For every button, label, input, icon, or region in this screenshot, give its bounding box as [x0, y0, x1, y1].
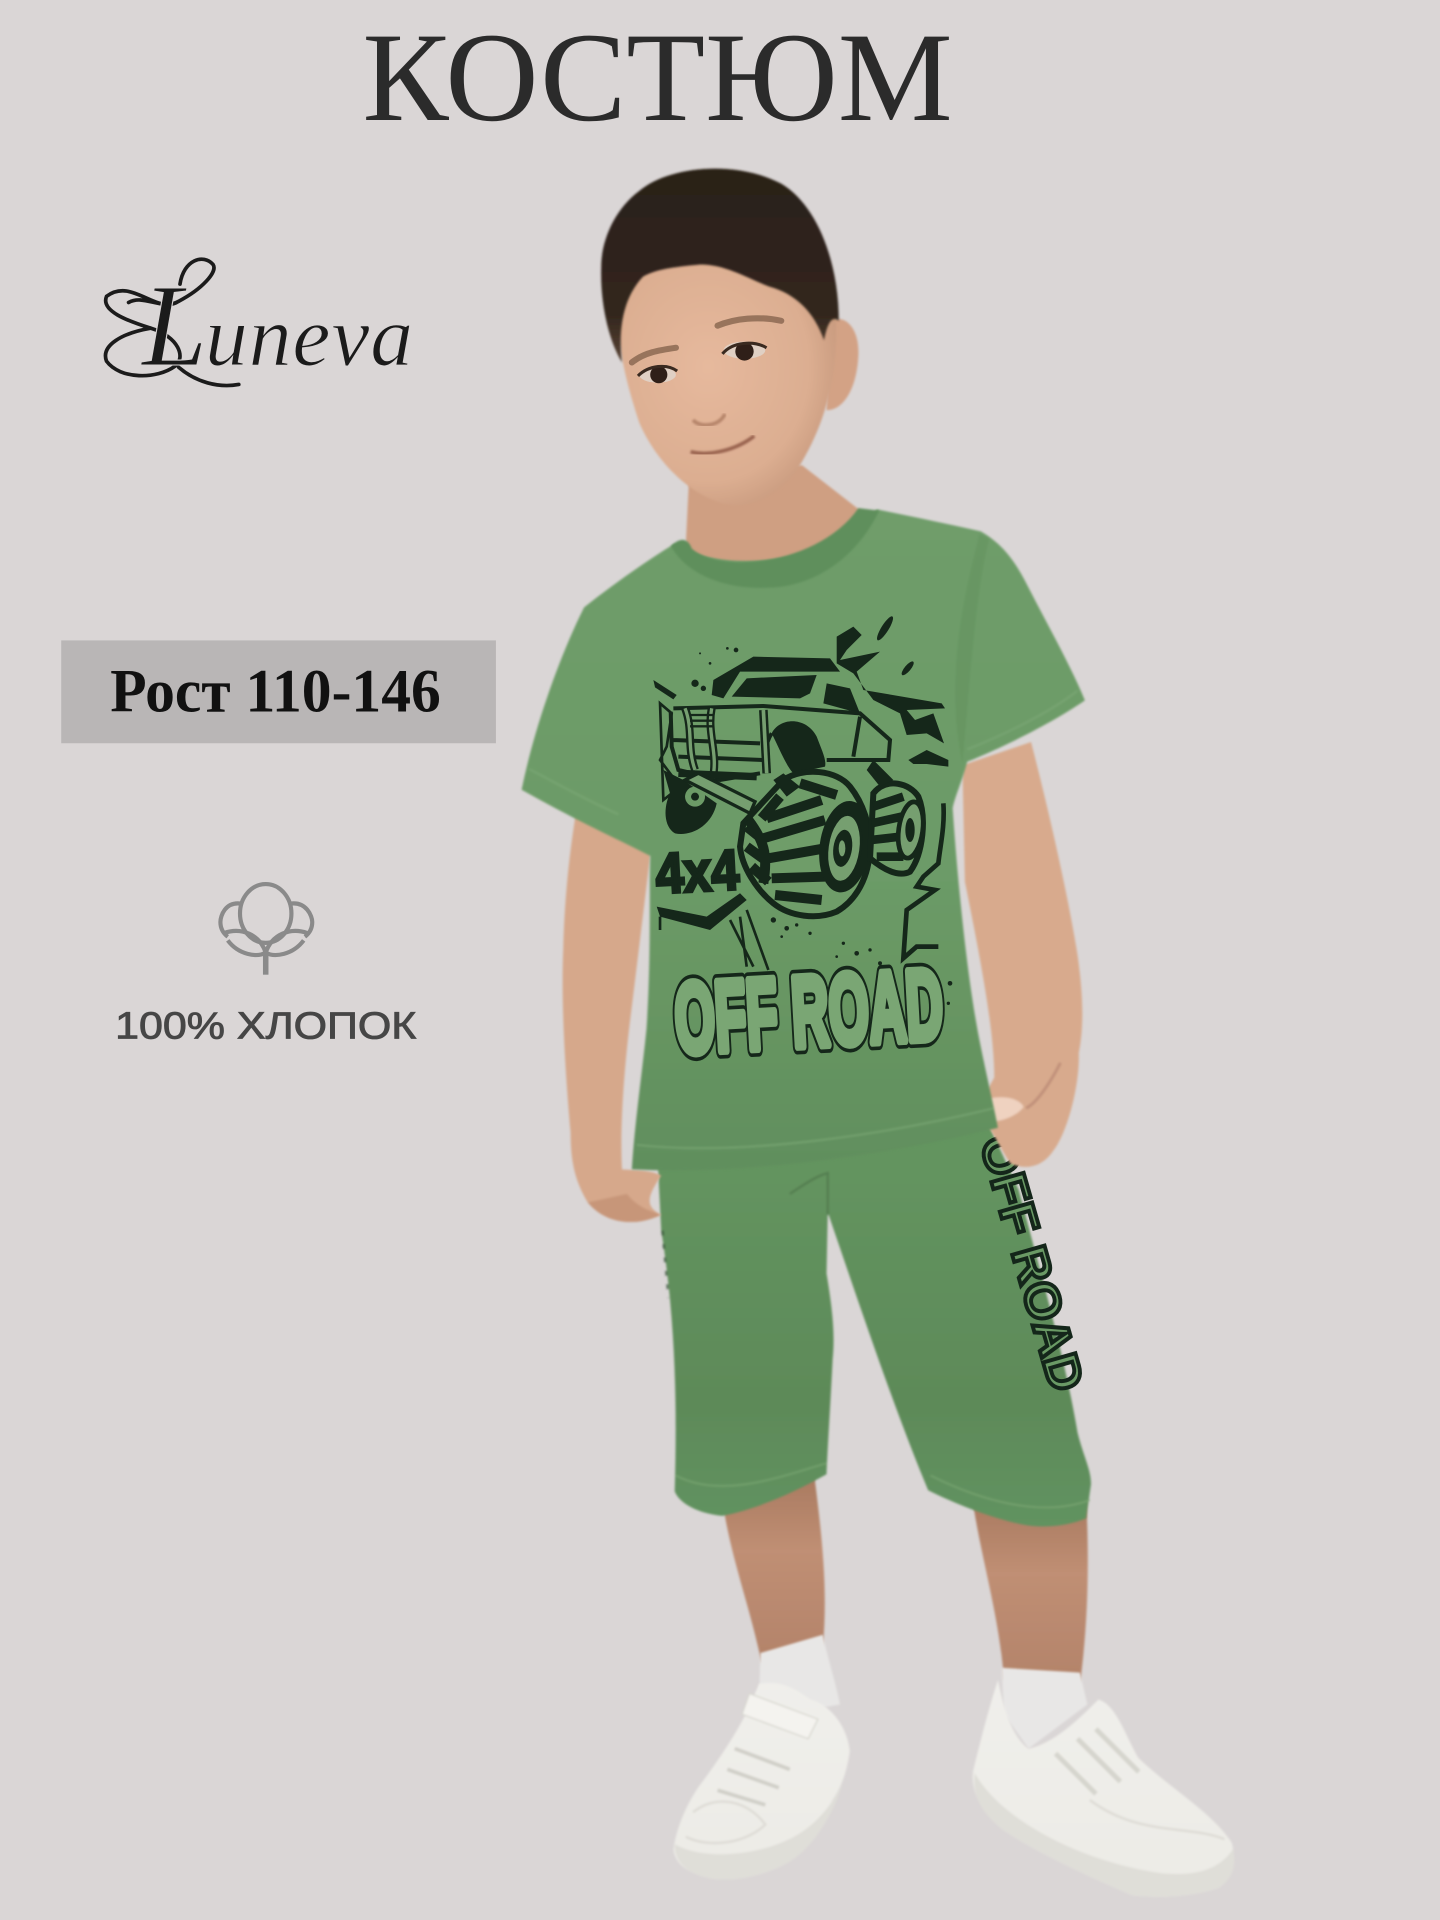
brand logo: Luneva — [140, 261, 413, 391]
right shoe — [973, 1680, 1234, 1897]
truck body — [671, 657, 890, 780]
hair — [601, 169, 839, 362]
size badge — [61, 640, 496, 743]
front wheel — [663, 770, 755, 834]
left shoe — [673, 1683, 850, 1880]
right arm — [962, 742, 1082, 1167]
face — [616, 253, 836, 505]
neck — [686, 465, 862, 573]
splash shapes — [653, 615, 948, 800]
collar — [671, 508, 879, 588]
4x4 label: 4x4 — [654, 839, 741, 906]
big wheel — [740, 772, 877, 916]
fabric label: 100% ХЛОПОК — [115, 1005, 416, 1047]
OFF ROAD print: OFF ROAD — [672, 948, 946, 1075]
left arm — [563, 808, 661, 1222]
rear wheel — [773, 760, 927, 874]
socks — [759, 1635, 1087, 1749]
t-shirt — [522, 509, 1085, 1170]
shorts side print: OFF ROAD — [969, 1129, 1093, 1397]
shorts — [658, 1120, 1091, 1526]
cotton icon — [220, 884, 312, 975]
legs — [722, 1476, 1088, 1684]
eyes — [638, 342, 767, 383]
ear — [827, 319, 858, 410]
ground cracks — [657, 803, 952, 1005]
title: КОСТЮМ — [362, 7, 953, 148]
shirt print — [653, 615, 952, 1075]
OFF ROAD print — [672, 948, 946, 1075]
OFF ROAD print: OFF ROAD — [672, 948, 946, 1075]
eyebrows — [632, 318, 781, 362]
nose — [693, 414, 725, 425]
mouth — [691, 436, 754, 453]
boy figure — [522, 169, 1234, 1897]
size badge: Рост 110-146 — [110, 657, 441, 725]
